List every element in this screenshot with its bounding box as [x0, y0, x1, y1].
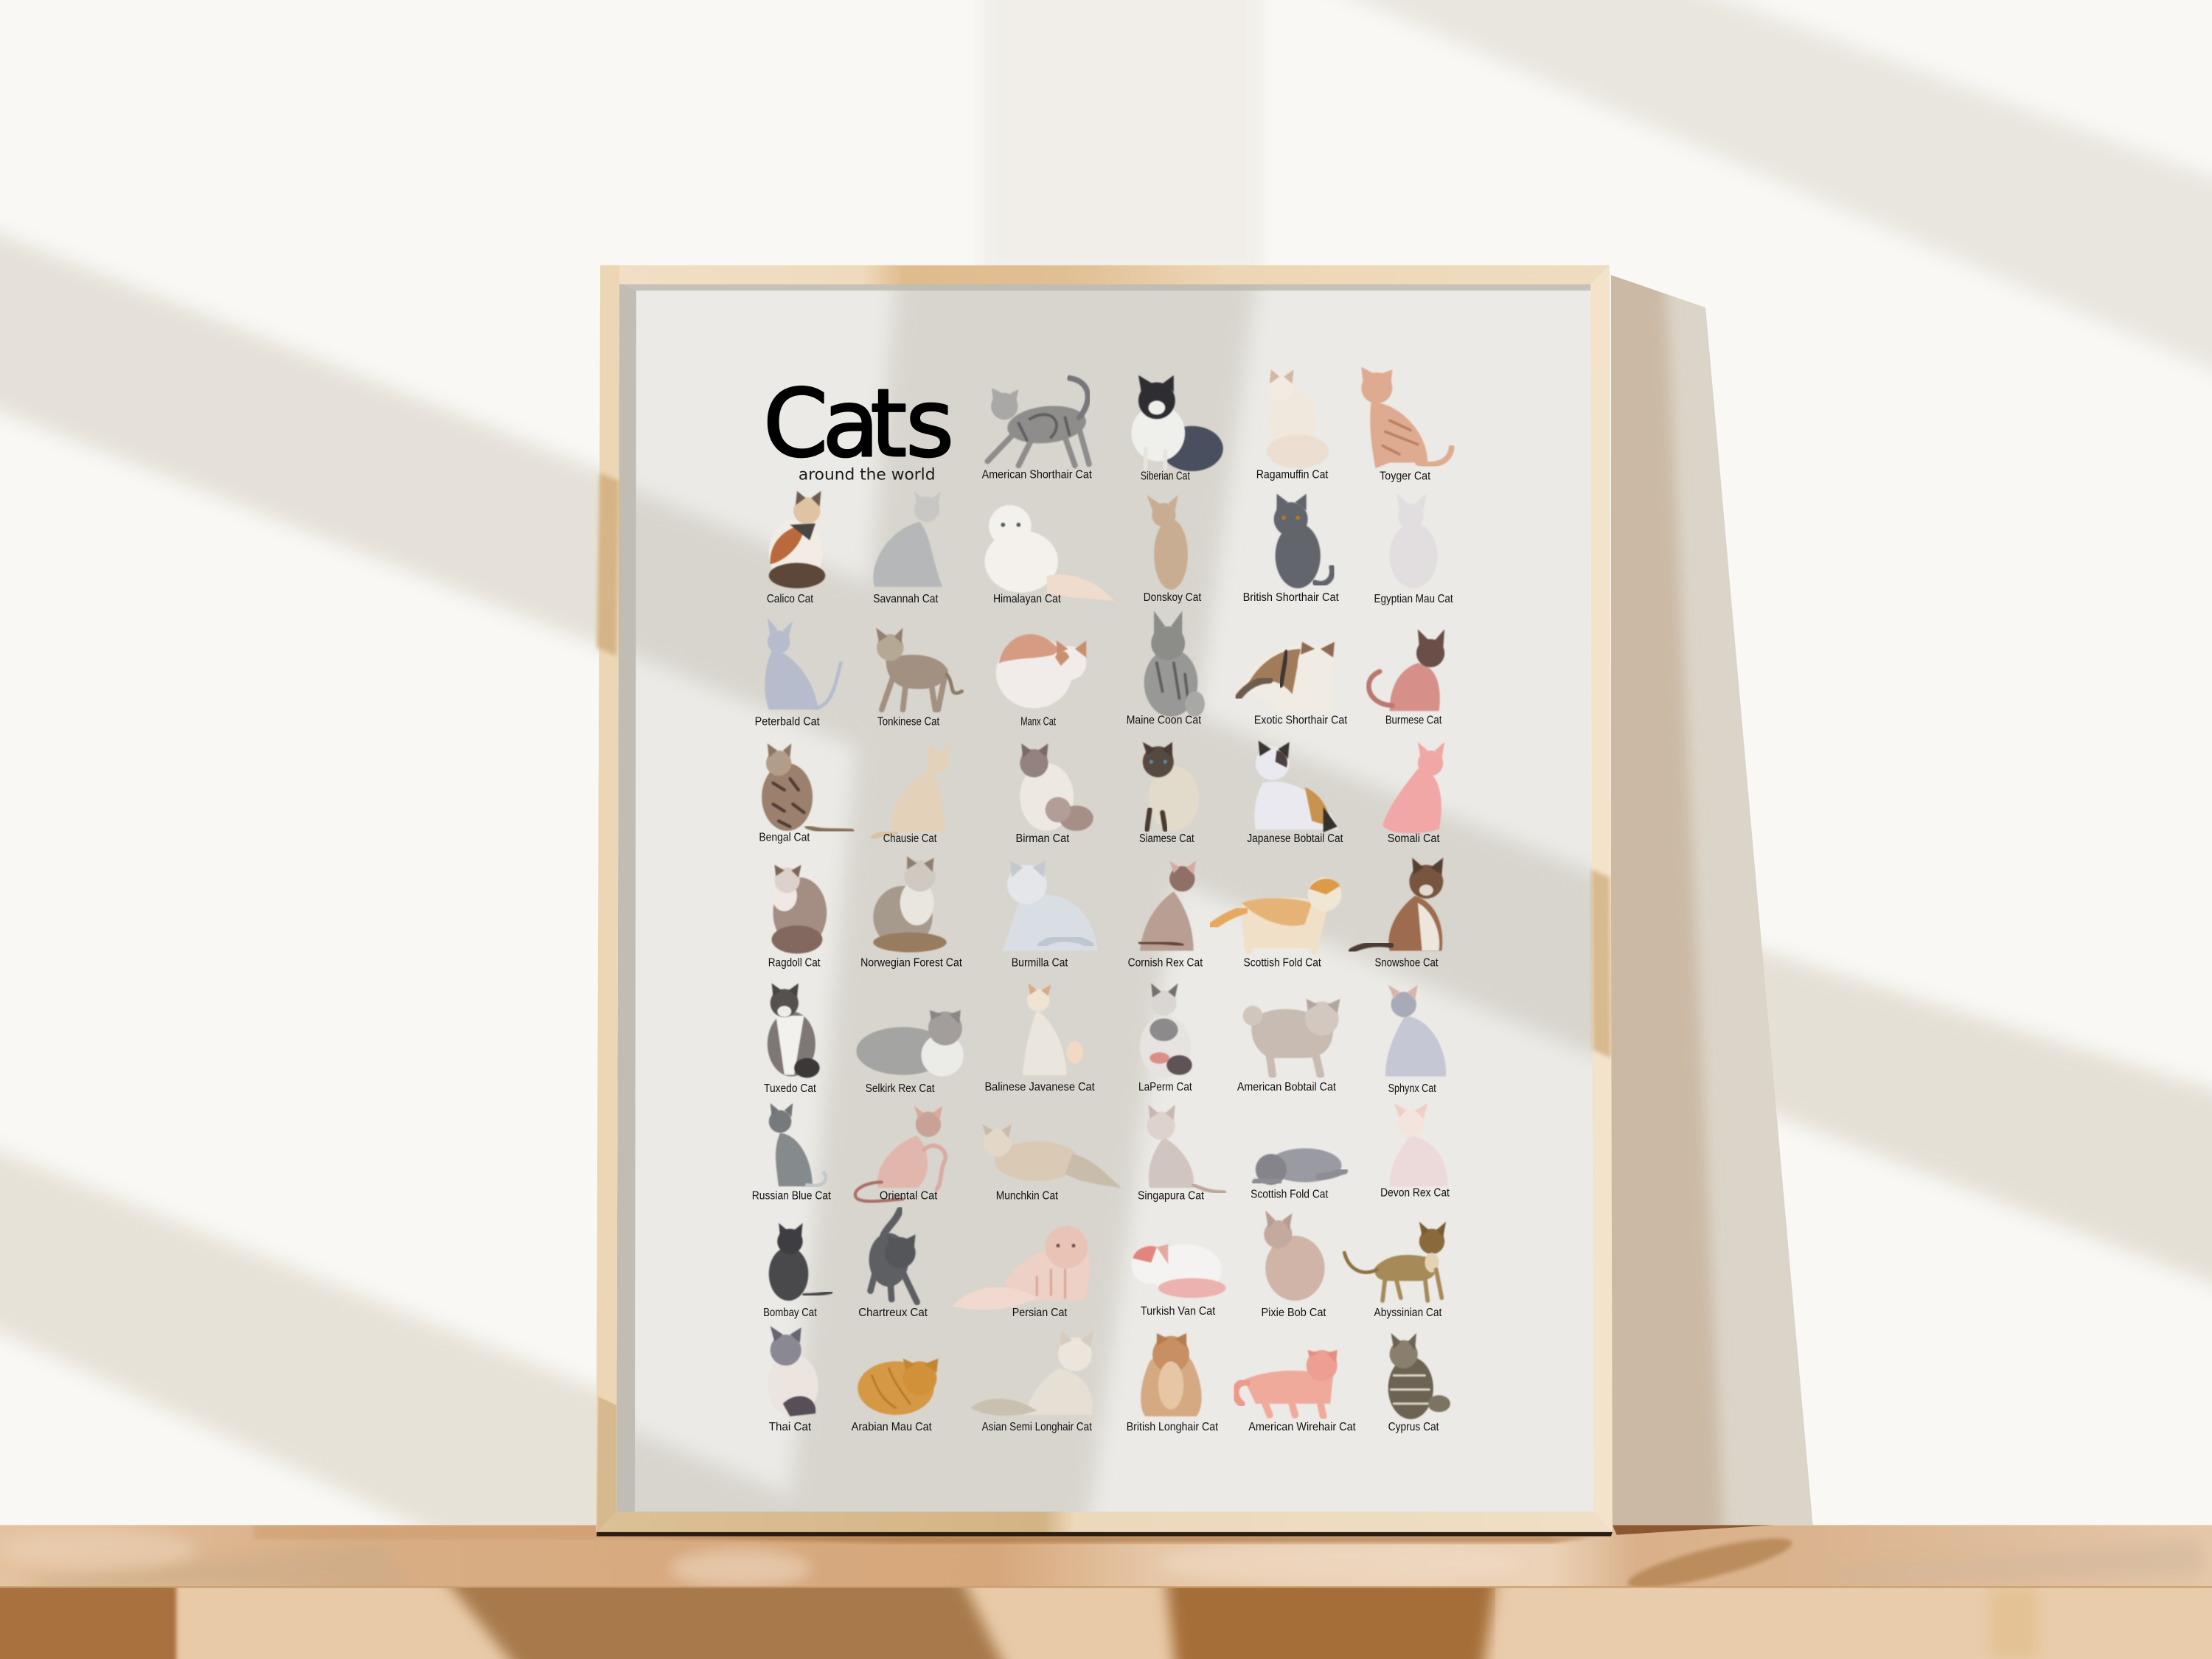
- Siberian Cat: Siberian Cat: [1141, 470, 1190, 483]
- Chausie Cat: [873, 743, 951, 845]
- Snowshoe Cat: Snowshoe Cat: [1374, 957, 1439, 970]
- Peterbald Cat: [755, 618, 841, 728]
- American Shorthair Cat: [982, 378, 1093, 481]
- shelf top surface: [0, 1525, 2212, 1587]
- Toyger Cat: Toyger Cat: [1380, 470, 1431, 483]
- Bengal Cat: Bengal Cat: [759, 831, 810, 844]
- Ragamuffin Cat: Ragamuffin Cat: [1256, 469, 1329, 481]
- Bombay Cat: Bombay Cat: [763, 1307, 817, 1319]
- Turkish Van Cat: Turkish Van Cat: [1141, 1305, 1216, 1318]
- Scottish Fold Cat: [1213, 877, 1342, 970]
- Thai Cat: [768, 1326, 818, 1433]
- shadow bands on frame: [597, 473, 619, 656]
- Birman Cat: Birman Cat: [1016, 832, 1070, 845]
- British Shorthair Cat: British Shorthair Cat: [1243, 591, 1339, 604]
- Siamese Cat: Siamese Cat: [1139, 832, 1194, 845]
- Ragdoll Cat: [768, 865, 827, 970]
- Birman Cat: [1016, 743, 1093, 845]
- British Longhair Cat: [1127, 1333, 1219, 1433]
- subtitle: around the world: [799, 465, 935, 484]
- Persian Cat: Persian Cat: [1012, 1307, 1068, 1319]
- LaPerm Cat: [1138, 984, 1192, 1093]
- Selkirk Rex Cat: Selkirk Rex Cat: [866, 1082, 935, 1095]
- Burmese Cat: [1368, 629, 1444, 727]
- Himalayan Cat: [984, 505, 1114, 605]
- Chausie Cat: Chausie Cat: [883, 832, 937, 845]
- Chartreux Cat: Chartreux Cat: [858, 1307, 928, 1319]
- Cyprus Cat: Cyprus Cat: [1388, 1421, 1439, 1433]
- Manx Cat: Manx Cat: [1020, 715, 1057, 728]
- British Shorthair Cat: [1243, 494, 1339, 604]
- Japanese Bobtail Cat: [1247, 740, 1343, 845]
- Tuxedo Cat: Tuxedo Cat: [764, 1082, 816, 1095]
- Pixie Bob Cat: Pixie Bob Cat: [1261, 1307, 1326, 1319]
- Tuxedo Cat: [764, 984, 820, 1095]
- Siberian Cat: [1131, 375, 1223, 483]
- Devon Rex Cat: Devon Rex Cat: [1380, 1186, 1450, 1199]
- Norwegian Forest Cat: Norwegian Forest Cat: [860, 957, 963, 970]
- Singapura Cat: Singapura Cat: [1138, 1189, 1205, 1202]
- Chartreux Cat: [858, 1211, 928, 1319]
- Asian Semi Longhair Cat: Asian Semi Longhair Cat: [982, 1421, 1093, 1433]
- Manx Cat: [996, 634, 1086, 728]
- Somali Cat: Somali Cat: [1388, 832, 1440, 845]
- Burmilla Cat: Burmilla Cat: [1012, 957, 1068, 970]
- Abyssinian Cat: Abyssinian Cat: [1374, 1307, 1442, 1319]
- Thai Cat: Thai Cat: [769, 1421, 812, 1433]
- frame rails: [600, 265, 1610, 285]
- Calico Cat: Calico Cat: [767, 593, 814, 605]
- Scottish Fold Cat: Scottish Fold Cat: [1244, 957, 1321, 970]
- Bengal Cat: [759, 743, 852, 844]
- American Bobtail Cat: American Bobtail Cat: [1237, 1081, 1337, 1093]
- Turkish Van Cat: [1131, 1245, 1226, 1318]
- Maine Coon Cat: [1127, 611, 1205, 727]
- Abyssinian Cat: [1344, 1222, 1446, 1319]
- Cornish Rex Cat: Cornish Rex Cat: [1128, 957, 1203, 970]
- Snowshoe Cat: [1352, 858, 1443, 970]
- Selkirk Rex Cat: [856, 1010, 964, 1095]
- Balinese Javanese Cat: [984, 984, 1095, 1093]
- American Shorthair Cat: American Shorthair Cat: [982, 469, 1093, 481]
- wooden shelf: [0, 1525, 2212, 1659]
- Oriental Cat: Oriental Cat: [880, 1189, 938, 1202]
- Somali Cat: [1382, 742, 1444, 845]
- Arabian Mau Cat: [852, 1358, 938, 1433]
- poster frame and print: [596, 265, 1613, 1552]
- Donskoy Cat: Donskoy Cat: [1144, 591, 1202, 604]
- Egyptian Mau Cat: [1374, 494, 1453, 605]
- shelf front face: [0, 1588, 2212, 1659]
- Savannah Cat: [873, 491, 942, 605]
- title: Cats: [763, 369, 954, 478]
- Scottish Fold Cat (lying): Scottish Fold Cat: [1251, 1188, 1329, 1200]
- Tonkinese Cat: Tonkinese Cat: [877, 715, 940, 728]
- Balinese Javanese Cat: Balinese Javanese Cat: [984, 1081, 1095, 1093]
- American Bobtail Cat: [1237, 999, 1340, 1093]
- Devon Rex Cat: [1380, 1103, 1450, 1199]
- Maine Coon Cat: Maine Coon Cat: [1127, 714, 1202, 727]
- Sphynx Cat: Sphynx Cat: [1388, 1082, 1436, 1095]
- Egyptian Mau Cat: Egyptian Mau Cat: [1374, 593, 1453, 605]
- Ragdoll Cat: Ragdoll Cat: [768, 957, 821, 970]
- Arabian Mau Cat: Arabian Mau Cat: [852, 1421, 932, 1433]
- Munchkin Cat: Munchkin Cat: [996, 1189, 1059, 1202]
- Toyger Cat: [1361, 366, 1452, 483]
- Cyprus Cat: [1388, 1333, 1450, 1433]
- frame cast shadow on wall: [1611, 275, 1812, 1525]
- Peterbald Cat: Peterbald Cat: [755, 715, 820, 728]
- Munchkin Cat: [982, 1124, 1121, 1202]
- Pixie Bob Cat: [1261, 1211, 1326, 1319]
- Singapura Cat: [1138, 1105, 1225, 1202]
- Calico Cat: [767, 491, 825, 605]
- Bombay Cat: [763, 1223, 831, 1319]
- Oriental Cat: [855, 1106, 945, 1202]
- British Longhair Cat: British Longhair Cat: [1127, 1421, 1219, 1433]
- cat illustrations grid: [752, 366, 1453, 1433]
- Cornish Rex Cat: [1128, 860, 1203, 970]
- Himalayan Cat: Himalayan Cat: [993, 593, 1061, 605]
- shading on print: [599, 268, 1608, 1552]
- Russian Blue Cat: Russian Blue Cat: [752, 1189, 832, 1202]
- print paper: [616, 284, 1594, 1512]
- Norwegian Forest Cat: [860, 856, 963, 970]
- Ragamuffin Cat: [1256, 369, 1329, 481]
- Donskoy Cat: [1144, 495, 1202, 604]
- Tonkinese Cat: [876, 627, 962, 728]
- Burmese Cat: Burmese Cat: [1385, 714, 1442, 727]
- Japanese Bobtail Cat: Japanese Bobtail Cat: [1247, 832, 1343, 845]
- Asian Semi Longhair Cat: [970, 1330, 1093, 1433]
- American Wirehair Cat: American Wirehair Cat: [1248, 1421, 1356, 1433]
- Russian Blue Cat: [752, 1103, 832, 1202]
- Burmilla Cat: [1001, 860, 1098, 970]
- Siamese Cat: [1139, 742, 1199, 845]
- Sphynx Cat: [1385, 984, 1446, 1095]
- Scottish Fold Cat (lying): [1251, 1148, 1344, 1200]
- Savannah Cat: Savannah Cat: [873, 593, 939, 605]
- Persian Cat: [952, 1226, 1090, 1319]
- American Wirehair Cat: [1236, 1350, 1356, 1433]
- Exotic Shorthair Cat: Exotic Shorthair Cat: [1254, 714, 1348, 727]
- LaPerm Cat: LaPerm Cat: [1138, 1081, 1192, 1093]
- Exotic Shorthair Cat: [1239, 642, 1348, 727]
